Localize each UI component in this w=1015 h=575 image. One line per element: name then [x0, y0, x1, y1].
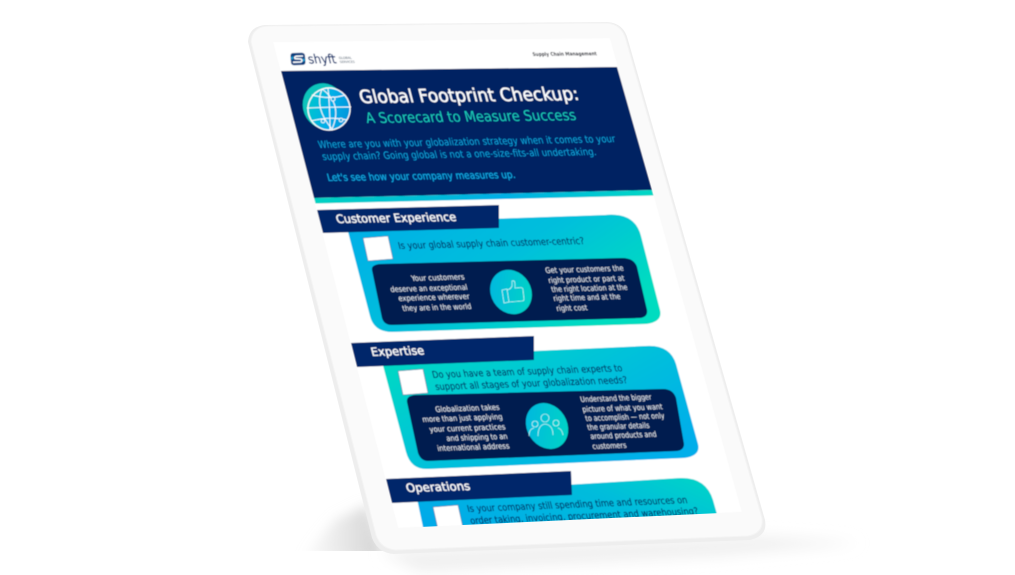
checkbox — [363, 236, 393, 261]
logo tagline: SERVICES — [339, 60, 355, 64]
icon: thumbs up — [489, 268, 533, 316]
question: Is your company still spending time and resources on — [466, 495, 689, 515]
partner label: Supply Chain Management: Supply Chain Management — [532, 51, 598, 58]
right text: around products and — [589, 430, 658, 441]
question: Do you have a team of supply chain experts to — [431, 363, 624, 381]
icon: globe — [302, 82, 352, 132]
section heading bar — [317, 205, 499, 233]
right text: the right location at the — [550, 283, 629, 294]
question: support all stages of your globalization needs? — [434, 375, 629, 393]
section heading bar — [351, 336, 534, 367]
question: order taking, invoicing, procurement and warehousing? — [469, 506, 700, 527]
logo wordmark: shyft — [306, 51, 338, 66]
right text: picture of what you want — [581, 402, 664, 414]
tablet frame — [248, 22, 765, 554]
question: Is your global supply chain customer-centric? — [397, 236, 586, 252]
intro paragraph: supply chain? Going global is not a one-size-fits-all undertaking. — [321, 147, 598, 163]
right text — [579, 393, 666, 451]
intro paragraph: Where are you with your globalization strategy when it comes to your — [317, 134, 617, 151]
right text: right time and at the — [552, 292, 622, 303]
logo tagline — [338, 56, 355, 64]
left text: experience wherever — [397, 292, 471, 303]
dark inner panel — [372, 258, 647, 325]
dark inner panel — [407, 389, 684, 461]
left text: Your customers — [409, 273, 466, 283]
header gradient strip — [314, 190, 654, 204]
left text: and shipping to an — [445, 432, 509, 443]
card background — [346, 215, 660, 332]
question — [466, 495, 700, 527]
section heading: Operations — [404, 479, 472, 495]
left text: more than just applying — [421, 412, 504, 424]
subtitle: A Scorecard to Measure Success — [364, 107, 578, 127]
right text: to accomplish — not only — [584, 411, 666, 423]
call to action: Let's see how your company measures up. — [326, 170, 517, 184]
right text: right product or part at — [547, 274, 626, 285]
left text — [389, 273, 473, 313]
left text: international address — [436, 442, 511, 453]
left text: Globalization takes — [434, 403, 501, 414]
panel: header — [281, 67, 654, 204]
left text: they are in the world — [401, 302, 473, 313]
section heading: Expertise — [369, 344, 426, 359]
left text: deserve an exceptional — [389, 283, 469, 294]
header background — [281, 67, 652, 198]
card background — [417, 477, 718, 527]
checkbox — [432, 504, 464, 526]
icon: team of people — [525, 402, 569, 450]
left text — [421, 403, 511, 453]
panel: operations — [386, 470, 718, 527]
logo: shyft global services — [290, 51, 355, 66]
right text: the granular details — [586, 421, 651, 432]
intro paragraph — [317, 134, 617, 163]
title: Global Footprint Checkup: — [357, 84, 581, 108]
left text: your current practices — [428, 422, 507, 434]
logo tagline: GLOBAL — [338, 56, 353, 60]
right text: customers — [591, 441, 628, 451]
card background — [381, 346, 698, 469]
section heading: Customer Experience — [334, 210, 458, 226]
section heading bar — [386, 471, 572, 503]
right text: right cost — [555, 303, 589, 313]
checkbox — [398, 369, 428, 395]
tablet screen — [280, 51, 718, 527]
right text: Get your customers the — [544, 264, 625, 275]
panel: customer experience — [317, 205, 660, 332]
tablet shadow — [318, 504, 796, 570]
right text — [544, 264, 629, 313]
right text: Understand the bigger — [579, 393, 653, 404]
icon: shyft logo mark — [290, 53, 306, 65]
question — [431, 363, 629, 393]
panel: expertise — [351, 336, 698, 469]
